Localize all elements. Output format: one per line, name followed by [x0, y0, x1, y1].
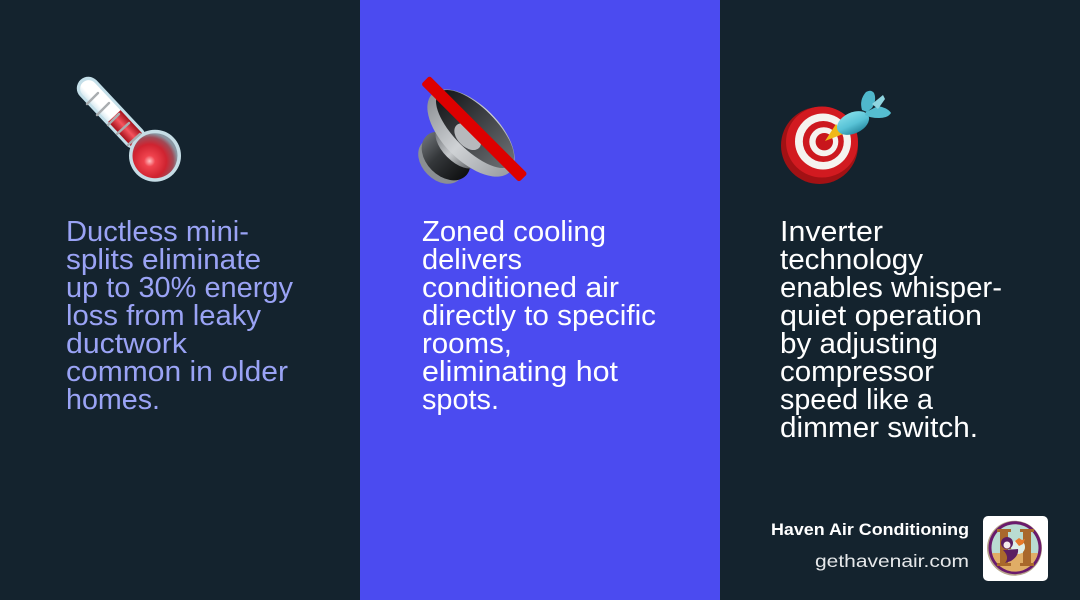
text block: middle panel: delivers	[422, 244, 522, 276]
panel: left background	[0, 0, 360, 600]
text block: middle panel: Zoned cooling	[422, 216, 606, 248]
text block: right panel: quiet operation	[780, 300, 982, 332]
text block: middle panel: eliminating hot	[422, 356, 618, 388]
text block: right panel: technology	[780, 244, 923, 276]
text block: left panel: homes.	[66, 384, 160, 416]
text block: right panel: enables whisper-	[780, 272, 1002, 304]
text block: middle panel	[422, 216, 656, 416]
text block: left panel: up to 30% energy	[66, 272, 293, 304]
text block: left panel: ductwork	[66, 328, 188, 360]
footer brand text	[771, 521, 969, 571]
icon: target with dart	[781, 91, 891, 184]
icon: thermometer	[72, 72, 181, 182]
icon: muted speaker	[409, 74, 530, 193]
icon: red slash	[421, 76, 527, 182]
footer brand text: Haven Air Conditioning	[771, 521, 969, 539]
panel: right background	[720, 0, 1080, 600]
logo: Haven badge	[983, 516, 1048, 581]
text block: left panel	[66, 216, 293, 416]
text block: middle panel: directly to specific	[422, 300, 656, 332]
text block: middle panel: rooms,	[422, 328, 512, 360]
text block: right panel: Inverter	[780, 216, 883, 248]
text block: middle panel: spots.	[422, 384, 499, 416]
panel: middle background	[360, 0, 720, 600]
text block: right panel	[780, 216, 1002, 444]
text block: left panel: common in older	[66, 356, 288, 388]
text block: right panel: by adjusting	[780, 328, 938, 360]
text block: left panel: splits eliminate	[66, 244, 261, 276]
text block: right panel: dimmer switch.	[780, 412, 978, 444]
text block: left panel: loss from leaky	[66, 300, 261, 332]
text block: middle panel: conditioned air	[422, 272, 619, 304]
text block: left panel: Ductless mini-	[66, 216, 249, 248]
text block: right panel: speed like a	[780, 384, 934, 416]
text block: right panel: compressor	[780, 356, 934, 388]
footer brand text: gethavenair.com	[815, 551, 969, 571]
